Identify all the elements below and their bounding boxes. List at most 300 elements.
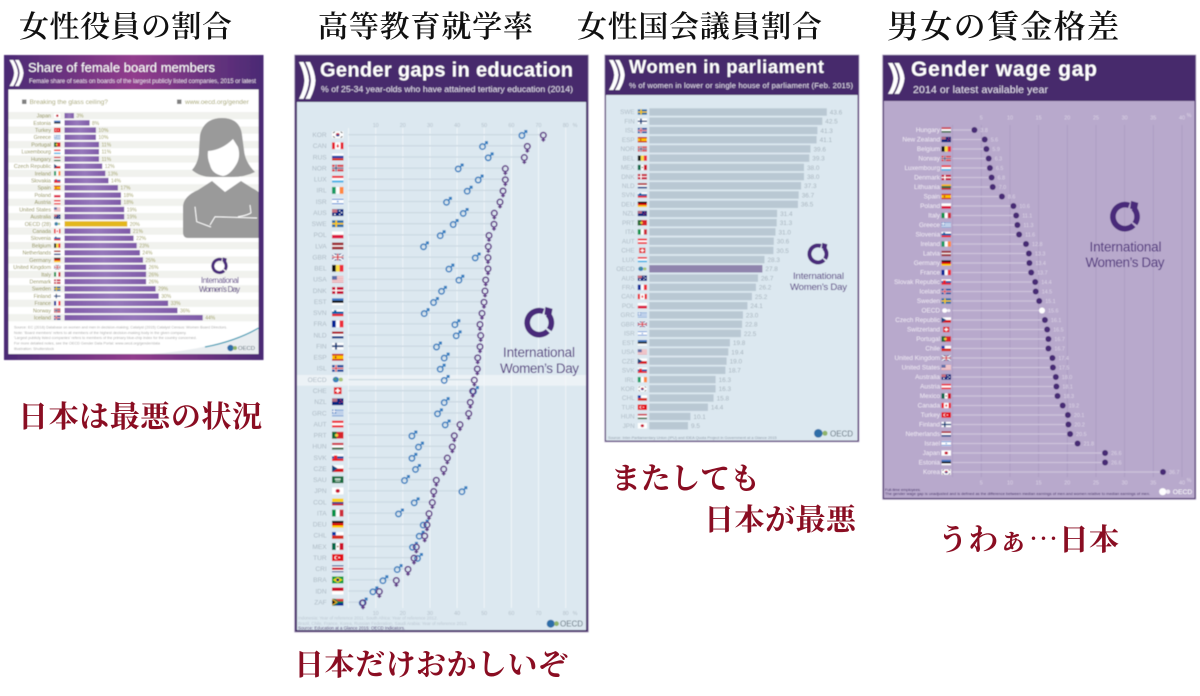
panel 2 subtitle: % of 25-34 year-olds who have attained tertiary education (2014) — [321, 84, 573, 94]
chart: board member row labels: Netherlands — [22, 251, 51, 257]
chart: wage gap country labels: Turkey — [921, 412, 941, 419]
icon: International Women's Day logo (parliament panel) — [790, 243, 847, 293]
panel 2 source notes: Indonesia: Year of reference 2011. South Africa: Year of reference 2012. — [298, 616, 438, 620]
chart: parliament values — [691, 109, 843, 430]
chart: wage gap country labels: Canada — [918, 403, 940, 410]
panel 4 heading: Gender wage gap — [911, 58, 1097, 81]
panel 1 heading: Share of female board members — [28, 60, 216, 75]
OECD logo (education panel) — [547, 620, 583, 629]
chart: board member row labels: Slovenia — [31, 236, 51, 242]
chart: board member values: 26% — [149, 280, 159, 286]
chart: wage gap values: 20.2 — [1074, 422, 1085, 428]
panel: gender wage gap — [882, 55, 1196, 500]
chart: wage gap values: 13.4 — [1035, 261, 1046, 267]
chart: education country codes: TUR — [313, 555, 327, 562]
chart: education country codes: JPN — [314, 488, 327, 495]
chart: parliament country codes: CAN — [621, 294, 635, 301]
chart: wage gap country labels: Ireland — [920, 241, 940, 248]
chart: education country codes: BEL — [314, 266, 327, 273]
chart: parliament values: 27.8 — [765, 266, 778, 273]
chart: wage gap country labels: Germany — [914, 260, 941, 267]
icon: International Women's Day logo (board panel): International — [201, 276, 239, 285]
chart: board member values: 18% — [124, 200, 134, 206]
chart: wage gap values: 11.1 — [1022, 214, 1032, 220]
chart: parliament country codes: ITA — [625, 229, 635, 236]
chart: board member row labels: Estonia — [33, 121, 51, 127]
panel 1 subtitle: Female share of seats on boards of the largest publicly listed companies, 2015 or latest — [29, 78, 256, 85]
chart: education flags — [332, 131, 344, 606]
chart: education top axis: 40 — [454, 123, 460, 129]
chart: board member values: 11% — [102, 157, 112, 163]
chart: wage gap country labels: Belgium — [917, 146, 940, 153]
chart: wage gap country labels: Switzerland — [907, 327, 940, 334]
OECD logo (board panel): OECD — [238, 346, 255, 352]
chart: parliament country codes: AUT — [622, 238, 635, 245]
chart: parliament values: 14.4 — [711, 405, 724, 412]
chart: education top axis: % — [573, 123, 578, 129]
icon: International Women's Day logo (education panel) — [500, 307, 579, 376]
chart: wage gap country labels: Netherlands — [906, 431, 940, 438]
chart: education country codes: AUT — [314, 421, 327, 428]
panel 1 source notes: Illustration: Shutterstock — [14, 347, 54, 351]
chart: education top axis: 30 — [427, 123, 433, 129]
chart: parliament values: 26.2 — [759, 285, 772, 292]
icon: International Women's Day logo (wage panel): Women’s Day — [1086, 255, 1165, 270]
chart: wage gap values: 17.5 — [1059, 366, 1069, 372]
icon: woman illustration — [183, 118, 258, 238]
chart: board member row labels: OECD (28) — [25, 222, 51, 228]
chart: education country codes: FIN — [316, 344, 327, 350]
panel: share of female board members — [4, 55, 264, 360]
chart: education country codes: DEU — [313, 522, 327, 529]
panel 4 source notes: The gender wage gap is unadjusted and is defined as the difference between median earnings of men and women relative to median earnings of men. — [885, 491, 1150, 496]
chart: education bottom axis: 60 — [508, 611, 514, 617]
chart: education bottom axis — [373, 611, 578, 617]
chart: wage gap flags — [942, 127, 951, 475]
chart: wage gap values: 15.1 — [1045, 299, 1056, 305]
chart: board member values: 8% — [92, 121, 100, 127]
chart: wage gap values: 5.9 — [992, 147, 1000, 153]
chart: wage gap values: 3.8 — [980, 128, 988, 134]
OECD logo (wage panel): OECD — [1173, 489, 1192, 496]
chart: wage gap top axis: 30 — [1122, 116, 1128, 122]
chart: parliament country codes: KOR — [621, 386, 635, 393]
chart: parliament country codes: SVN — [622, 192, 635, 199]
chart: education top axis: 70 — [536, 123, 542, 129]
chart: board member row labels: Sweden — [32, 287, 51, 293]
chart: board member values: 19% — [127, 207, 137, 213]
icon: International Women's Day logo (parliament panel): International — [793, 271, 844, 282]
chart: board member row labels — [13, 114, 52, 322]
chart: wage gap country labels: Australia — [915, 374, 940, 381]
chart: education country codes: POL — [313, 232, 327, 239]
chart: wage gap values: 16.7 — [1054, 337, 1065, 343]
chart: parliament country codes: CHE — [621, 248, 635, 255]
title: tertiary education: 高等教育就学率 — [318, 2, 533, 46]
panel 1 source notes — [14, 326, 227, 351]
chart: parliament flags — [638, 109, 647, 429]
panel 4 subtitle: 2014 or latest available year — [913, 84, 1048, 96]
chart: parliament country codes: IRL — [625, 377, 635, 384]
chart: wage gap values: 13.7 — [1037, 270, 1048, 276]
chart: wage gap country labels: Chile — [925, 346, 940, 353]
chart: parliament country codes: HUN — [621, 414, 635, 421]
chart: parliament country codes: NOR — [620, 146, 635, 153]
chart: education country codes: CZE — [314, 466, 327, 473]
chart: parliament country codes: JPN — [623, 423, 635, 430]
chart: education country codes: EST — [314, 299, 327, 306]
chart: board member values: 10% — [98, 128, 109, 134]
chart: wage gap bottom axis — [980, 478, 1192, 487]
chart: wage gap values: 11.3 — [1023, 223, 1033, 229]
caption: parliament comment, second line: 日本が最悪 — [704, 495, 858, 539]
chart: parliament values: 22.8 — [745, 322, 758, 329]
chart: board member values: 21% — [133, 229, 143, 235]
chart: board member values: 25% — [146, 258, 156, 264]
chart: wage gap values: 26.6 — [1111, 451, 1122, 457]
OECD logo (wage panel) — [1159, 488, 1192, 496]
chart: parliament values: 25.2 — [755, 294, 768, 301]
chart: education bottom axis: 10 — [373, 611, 379, 617]
chart: wage gap country labels: OECD — [922, 308, 940, 315]
chart: board member row labels: Luxembourg — [22, 150, 51, 156]
chart: board member values: 17% — [120, 186, 131, 192]
chart: education bottom axis: 40 — [454, 611, 460, 617]
chart: parliament values: 38.0 — [807, 174, 820, 181]
panel 1 tag: breaking the glass ceiling: Breaking the glass ceiling? — [30, 99, 108, 106]
chart: wage gap country labels: Slovak Republic — [894, 279, 941, 286]
chart: wage gap country labels: Portugal — [916, 336, 940, 343]
chart: education top axis — [373, 123, 578, 129]
chart: education bottom axis: 80 — [563, 611, 569, 617]
chart: wage gap values: 18.1 — [1062, 384, 1073, 390]
chart: board member values: 33% — [171, 301, 181, 307]
chart: board member values: 3% — [76, 114, 84, 120]
chart: parliament values: 10.1 — [693, 414, 706, 421]
chart: parliament country codes: AUS — [622, 275, 635, 282]
chart: education country codes: ISR — [316, 199, 327, 206]
OECD logo (board panel) — [227, 345, 255, 352]
chart: board member row labels: Finland — [34, 294, 51, 300]
chart: board member row labels: Czech Republic — [14, 164, 51, 170]
chart: wage gap country labels: Poland — [920, 203, 940, 210]
chart: board member values: 30% — [161, 294, 172, 300]
chart: education bottom axis: % — [573, 611, 578, 617]
chart: wage gap top axis: 25 — [1093, 116, 1099, 122]
OECD logo (parliament panel): OECD — [830, 429, 853, 438]
chart: wage gap country labels: Latvia — [923, 251, 940, 258]
chart: parliament values: 39.6 — [814, 146, 826, 153]
chart: education country codes: ISL — [317, 366, 327, 373]
chart: wage gap top axis: % — [1187, 113, 1192, 119]
chart: education country codes: COL — [313, 499, 327, 506]
chart: parliament values: 43.6 — [830, 109, 843, 116]
title: women in parliament: 女性国会議員割合 — [577, 2, 822, 46]
chart: board member values: 29% — [158, 287, 169, 293]
panel 2 source notes: Source: Education at a Glance 2015: OECD Indicators. — [298, 626, 405, 630]
chart: parliament country codes: DEU — [621, 202, 635, 208]
chart: education country codes: NOR — [312, 165, 327, 172]
chart: parliament country codes: NLD — [622, 183, 635, 190]
chart: education country codes: SWE — [312, 221, 327, 228]
chart: wage gap values: 26.6 — [1111, 460, 1122, 466]
chart: parliament country codes: DNK — [621, 174, 635, 181]
icon: International Women's Day logo (education panel): Women’s Day — [500, 361, 579, 376]
chart: board member row labels: United States — [19, 207, 51, 213]
chart: wage gap values: 16.7 — [1054, 346, 1065, 352]
chart: wage gap connector lines — [953, 130, 1163, 472]
chart: wage gap country labels: Sweden — [917, 298, 940, 305]
chart: wage gap country labels: Greece — [919, 222, 940, 229]
chart: wage gap top axis: 5 — [980, 116, 983, 122]
chart: board member row labels: Germany — [29, 258, 51, 264]
chart: parliament values: 22.5 — [744, 331, 757, 338]
chart: wage gap bottom axis: 35 — [1150, 481, 1156, 487]
chart: parliament values: 18.7 — [728, 368, 741, 375]
chart: parliament bars — [649, 108, 827, 429]
chart: board member row labels: Ireland — [35, 171, 51, 177]
chart: wage gap top axis: 10 — [1007, 116, 1013, 122]
chart: education top axis: 50 — [481, 123, 487, 129]
panel 2 source notes: Brazil, Chile, France, Korea, Russian Federation, Saudi Arabia: Year of reference 2013. — [298, 621, 468, 626]
chart: parliament values: 30.5 — [776, 248, 789, 255]
chart: education country codes: LUX — [314, 176, 327, 184]
panel 2 source notes — [298, 616, 468, 630]
chart: education bottom axis: 50 — [481, 611, 487, 617]
chart: education country codes — [308, 132, 327, 606]
chart: parliament values: 23.0 — [746, 312, 759, 319]
chart: parliament country codes — [616, 109, 635, 430]
chart: parliament country codes: EST — [622, 340, 635, 347]
chart: education country codes: FRA — [314, 321, 327, 328]
chart: parliament country codes: PRT — [622, 220, 635, 227]
caption: wage gap comment: うわぁ…日本 — [938, 515, 1119, 559]
chart: wage gap values: 12.8 — [1032, 242, 1042, 248]
chart: wage gap country labels: Norway — [918, 156, 941, 163]
icon: International Women's Day logo (parliament panel): Women’s Day — [790, 282, 847, 293]
chart: wage gap values: 7.0 — [999, 185, 1006, 191]
chart: parliament country codes: TUR — [622, 404, 635, 411]
chart: parliament values: 19.8 — [733, 340, 746, 347]
chart: education country codes: SVN — [313, 310, 327, 317]
chart: wage gap values: 14.4 — [1041, 280, 1052, 286]
chart: wage gap values: 6.3 — [995, 156, 1002, 162]
chart: board member values — [76, 114, 216, 322]
chart: wage gap values: 5.6 — [991, 138, 998, 144]
chart: parliament values: 41.1 — [820, 137, 832, 144]
icon: International Women's Day logo (board panel): Women’s Day — [199, 285, 240, 294]
chart: parliament values: 42.5 — [825, 119, 838, 126]
chart: board member row labels: Denmark — [30, 280, 51, 286]
chart: education country codes: SVK — [313, 455, 327, 462]
chart: board member bars — [64, 113, 203, 320]
chart: wage gap country labels: Korea — [923, 469, 940, 476]
chart: parliament country codes: CZE — [622, 358, 635, 365]
chart: wage gap bottom axis: 40 — [1179, 481, 1185, 487]
chart: education women markers — [360, 132, 546, 609]
icon: header chevrons — [609, 60, 625, 90]
chart: wage gap dots — [971, 127, 1166, 475]
chart: parliament values: 31.0 — [778, 229, 791, 236]
chart: wage gap top axis — [980, 113, 1192, 122]
chart: wage gap country labels: France — [920, 270, 940, 277]
chart: education bottom axis: 20 — [400, 611, 406, 617]
chart: board member values: 13% — [108, 171, 118, 177]
panel: gender gaps in education — [294, 55, 588, 632]
chart: parliament country codes: OECD — [616, 266, 635, 273]
chart: parliament country codes: ESP — [622, 137, 635, 144]
chart: wage gap country labels: Japan — [923, 450, 940, 457]
chart: education country codes: GRC — [312, 410, 327, 417]
chart: wage gap country labels: Luxembourg — [904, 165, 940, 172]
chart: parliament country codes: NZL — [623, 211, 635, 218]
chart: parliament country codes: GRC — [620, 312, 635, 319]
chart: wage gap values: 15.6 — [1048, 308, 1058, 314]
chart: education country codes: NLD — [313, 332, 327, 339]
chart: parliament country codes: MEX — [621, 165, 635, 172]
chart: education country codes: HUN — [312, 444, 327, 451]
chart: board member values: 22% — [136, 236, 147, 242]
icon: header chevrons — [888, 63, 904, 94]
chart: education country codes: AUS — [313, 210, 327, 217]
chart: parliament values: 16.3 — [719, 386, 731, 393]
chart: parliament values: 41.3 — [820, 128, 833, 135]
chart: wage gap values: 13.3 — [1035, 252, 1045, 258]
chart: parliament country codes: FRA — [622, 284, 635, 292]
chart: wage gap values: 20.1 — [1074, 413, 1084, 419]
chart: education country codes: ITA — [317, 510, 327, 517]
chart: education top axis: 60 — [508, 123, 514, 129]
chart: board member row labels: Poland — [34, 193, 51, 199]
chart: wage gap country labels: Spain — [924, 194, 940, 201]
chart: education country codes: OECD — [308, 377, 327, 384]
chart: board member values: 36% — [180, 308, 191, 314]
chart: education country codes: PRT — [314, 432, 327, 440]
chart: wage gap country labels: Israel — [924, 441, 940, 448]
chart: wage gap country labels: Austria — [920, 384, 940, 391]
chart: parliament values: 24.1 — [750, 303, 763, 310]
chart: board member row labels: Turkey — [35, 128, 51, 134]
panel 1 tag: website: www.oecd.org/gender — [184, 99, 250, 106]
panel 1 source notes: 'Largest publicly listed companies' refers to members of the primary blue-chip index for the country concerned. — [14, 336, 197, 340]
chart: wage gap country labels: Mexico — [920, 393, 940, 400]
chart: board member row labels: Hungary — [31, 157, 51, 163]
chart: board member row labels: Spain — [37, 186, 51, 192]
chart: education country codes: DNK — [313, 288, 327, 295]
chart: board member values: 10% — [98, 135, 109, 141]
chart: education country codes: MEX — [312, 544, 327, 551]
chart: wage gap bottom axis: 10 — [1007, 481, 1013, 487]
chart: education country codes: CHE — [313, 388, 327, 395]
chart: parliament country codes: SWE — [620, 109, 635, 116]
chart: parliament values: 38.0 — [807, 165, 820, 172]
caption: education panel comment: 日本だけおかしいぞ — [294, 640, 568, 684]
chart: education country codes: USA — [313, 277, 327, 284]
chart: education country codes: IDN — [315, 588, 327, 595]
panel 2 heading: Gender gaps in education — [320, 60, 573, 82]
icon: International Women's Day logo (wage panel): International — [1090, 240, 1162, 254]
chart: parliament values: 39.3 — [812, 156, 825, 162]
chart: board member row labels: Japan — [37, 114, 51, 120]
chart: wage gap values: 21.8 — [1084, 442, 1094, 448]
icon: International Women's Day logo (board panel) — [199, 257, 240, 294]
chart: education country codes: SAU — [313, 477, 327, 484]
chart: board member values: 26% — [149, 272, 159, 278]
chart: wage gap values: 17.4 — [1058, 356, 1069, 362]
chart: wage gap values: 20.5 — [1076, 432, 1087, 438]
chart: education country codes: ESP — [313, 355, 327, 362]
chart: education country codes: IRL — [316, 188, 327, 195]
chart: parliament values: 36.5 — [801, 202, 814, 209]
chart: wage gap bottom axis: 5 — [980, 481, 983, 487]
OECD logo (education panel): OECD — [560, 620, 583, 629]
chart: parliament values: 19.0 — [730, 358, 742, 366]
chart: parliament values: 15.8 — [717, 395, 729, 402]
icon: header chevrons — [299, 62, 316, 99]
chart: parliament values: 36.7 — [802, 192, 815, 199]
chart: board member flags — [54, 113, 61, 320]
panel 4 source notes: Full-time employees. — [885, 487, 921, 492]
panel 4 source notes — [885, 487, 1150, 496]
chart: education country codes: BRA — [313, 577, 327, 584]
chart: wage gap values: 36.7 — [1169, 470, 1180, 476]
chart: parliament country codes: ISR — [624, 331, 635, 338]
chart: board member values: 11% — [102, 150, 112, 156]
chart: wage gap country labels: Estonia — [919, 460, 940, 467]
chart: wage gap country labels: Lithuania — [914, 184, 940, 191]
caption: parliament comment, first line: またしても — [611, 454, 760, 498]
chart: wage gap country labels: Italy — [928, 213, 941, 220]
chart: parliament values: 9.5 — [691, 423, 700, 430]
chart: board member values: 14% — [111, 178, 122, 184]
chart: wage gap values: 10.6 — [1019, 204, 1030, 210]
chart: parliament values: 37.3 — [804, 183, 817, 190]
OECD row highlight — [297, 375, 586, 386]
chart: board member values: 11% — [102, 142, 112, 148]
panel 1 source notes: Source: EC (2016) Database on women and men in decision-making; Catalyst (2015) Catalyst Census: Women Board Directors. — [14, 326, 227, 330]
OECD logo (parliament panel) — [814, 429, 853, 438]
panel 1 source notes: Note: 'Board members' refers to all members of the highest decision-making body in the given company. — [14, 331, 186, 335]
panel: women in parliament — [605, 55, 859, 442]
panel 1 source notes: For more detailed notes, see the OECD Gender Data Portal: www.oecd.org/gender/data — [14, 342, 161, 346]
chart: wage gap country labels: Slovenia — [915, 232, 940, 239]
chart: board member values: 24% — [142, 251, 153, 257]
caption: board panel comment: 日本は最悪の状況 — [18, 392, 262, 436]
chart: wage gap country labels: United Kingdom — [895, 355, 940, 362]
chart: wage gap values: 6.8 — [998, 176, 1005, 182]
chart: board member row labels: Slovakia — [31, 178, 51, 184]
chart: parliament values: 16.3 — [719, 377, 731, 384]
chart: board member row labels: France — [34, 301, 51, 307]
chart: parliament country codes: ISL — [625, 128, 635, 135]
chart: education bottom axis: 70 — [536, 611, 542, 617]
chart: parliament values: 31.3 — [780, 220, 793, 227]
chart: wage gap country labels: Finland — [919, 422, 940, 429]
chart: education top axis: 10 — [373, 123, 379, 129]
chart: education country codes: LVA — [315, 243, 327, 250]
chart: wage gap values: 19.2 — [1069, 404, 1079, 410]
chart: parliament country codes: USA — [622, 349, 635, 356]
chart: wage gap top axis: 20 — [1064, 116, 1070, 122]
title: female board share: 女性役員の割合 — [19, 2, 232, 46]
chart: wage gap bottom axis: 30 — [1122, 481, 1128, 487]
chart: wage gap values: 16.5 — [1053, 328, 1064, 334]
chart: wage gap bottom axis: 20 — [1064, 481, 1070, 487]
chart: education country codes: NZL — [314, 399, 327, 406]
chart: education connector lines — [348, 135, 543, 602]
chart: board member row labels: Canada — [32, 229, 51, 235]
chart: education country codes: RUS — [313, 154, 327, 161]
